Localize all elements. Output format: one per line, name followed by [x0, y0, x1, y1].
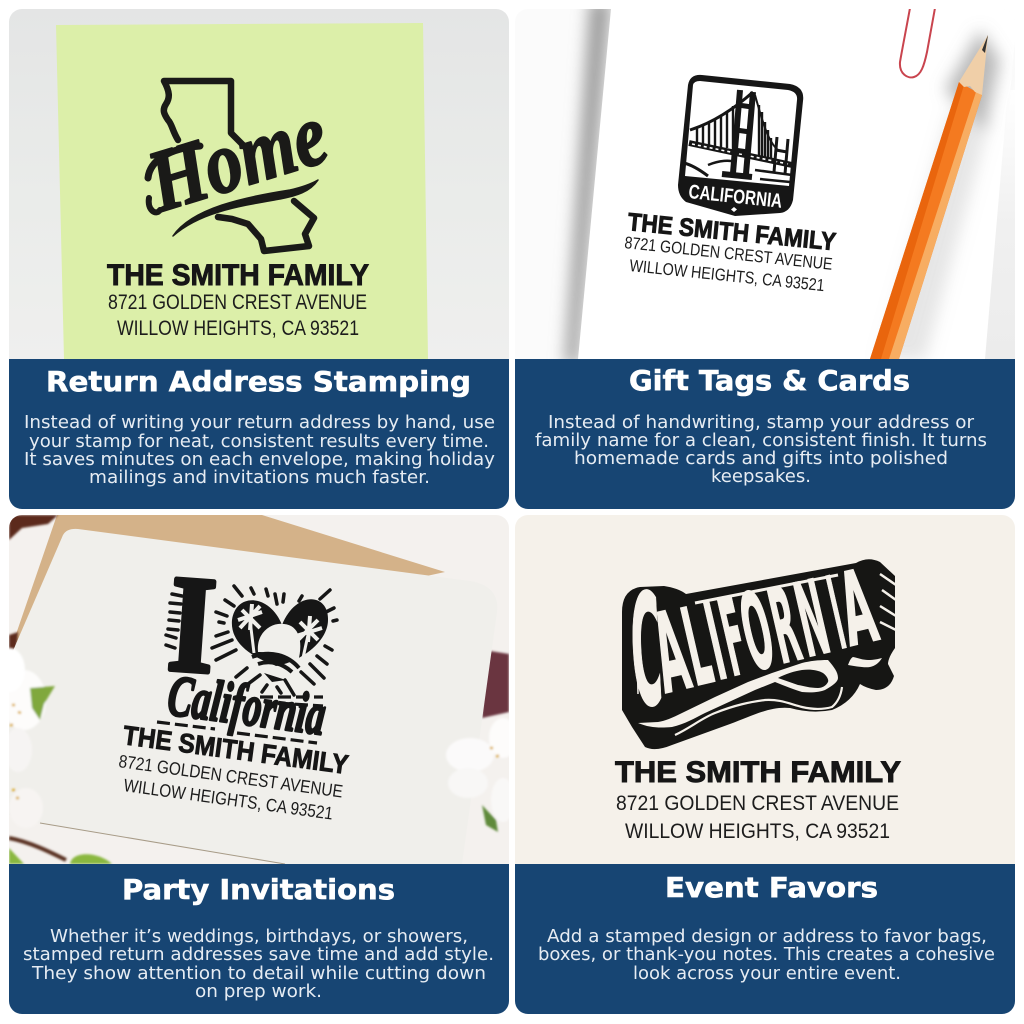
letters: A: [829, 548, 887, 670]
photo background: [515, 515, 1015, 864]
California state outline north: [164, 81, 244, 146]
sticky note: [56, 23, 428, 359]
swoosh under Home: [173, 180, 318, 236]
ribbon swash: [638, 660, 838, 728]
stamp text: family name and address: WILLOW HEIGHTS, CA 93521: [629, 256, 826, 295]
body text: Instead of writing your return address by hand, use: [24, 413, 495, 433]
stamp text: family name and address: THE SMITH FAMILY: [626, 208, 837, 256]
stamp text: family name and address: [107, 259, 369, 340]
caption band: [515, 359, 1015, 509]
body text: on prep work.: [195, 982, 322, 1002]
ribbon lower streak: [675, 687, 842, 735]
letters: I: [696, 581, 735, 705]
stamp text: family name and address: THE SMITH FAMILY: [107, 259, 369, 292]
letters: N: [785, 558, 839, 681]
sunburst rays: [166, 586, 337, 695]
stamp text: family name and address: [117, 720, 350, 824]
right backdrop strip: [985, 163, 1015, 359]
body text: It saves minutes on each envelope, making holiday: [24, 450, 495, 470]
stamp icon: California outline with Home script: [137, 81, 338, 251]
body text: look across your entire event.: [633, 964, 901, 984]
stamp text: family name and address: THE SMITH FAMILY: [615, 756, 901, 789]
sheet shadow: [565, 0, 611, 365]
bridge: [684, 90, 792, 182]
photo background: wall: [9, 9, 509, 359]
letters: [626, 548, 887, 742]
heading: Return Address Stamping: [46, 365, 471, 398]
stamp text: family name and address: WILLOW HEIGHTS, CA 93521: [122, 775, 334, 824]
panel: return address stamping: [9, 9, 509, 509]
letters: A: [642, 589, 700, 719]
stamp text: family name and address: 8721 GOLDEN CREST AVENUE: [624, 233, 833, 274]
dark foliage: [9, 515, 509, 718]
caption band: [515, 864, 1015, 1014]
caption band: [9, 864, 509, 1014]
stamp text: family name and address: 8721 GOLDEN CREST AVENUE: [616, 792, 899, 815]
heading: Event Favors: [665, 871, 878, 904]
stamp text: family name and address: [615, 756, 901, 843]
letters: I: [819, 557, 854, 673]
top stripe: [695, 575, 838, 603]
Home script: Home: [137, 86, 338, 231]
body text: [538, 927, 995, 984]
panel: gift tags and cards: [515, 0, 1018, 509]
photo background: [9, 515, 509, 864]
stamp text: family name and address: 8721 GOLDEN CREST AVENUE: [108, 291, 367, 314]
California state outline south: [218, 201, 314, 251]
heart with sun and palms: [232, 599, 328, 682]
body text: Add a stamped design or address to favor bags,: [547, 927, 987, 947]
invitation card: [13, 528, 492, 719]
stamp icon: California lettering: [622, 548, 896, 749]
white sheet: [578, 9, 623, 359]
panel: party invitations: [0, 515, 517, 1014]
stamp text: family name and address: WILLOW HEIGHTS, CA 93521: [117, 317, 359, 340]
stamp text: family name and address: THE SMITH FAMILY: [121, 720, 350, 780]
body text: keepsakes.: [711, 467, 811, 487]
body text: [24, 413, 495, 488]
body text: family name for a clean, consistent finish. It turns: [535, 431, 987, 451]
right hatch marks: [880, 574, 896, 630]
body text: Instead of handwriting, stamp your address or: [548, 413, 975, 433]
body text: Whether it’s weddings, birthdays, or showers,: [50, 927, 468, 947]
stamp text: family name and address: 8721 GOLDEN CREST AVENUE: [117, 751, 344, 802]
body text: [23, 927, 494, 1002]
letters: F: [710, 577, 757, 701]
heading: Party Invitations: [122, 873, 395, 906]
badge label: CALIFORNIA: [687, 181, 783, 213]
body text: your stamp for neat, consistent results every time.: [29, 432, 489, 452]
body text: [535, 413, 987, 487]
paperclip: [900, 8, 935, 77]
body text: homemade cards and gifts into polished: [574, 449, 948, 469]
pencil shadow: [880, 30, 1000, 360]
Home script: [144, 122, 328, 216]
stamp text: family name and address: WILLOW HEIGHTS, CA 93521: [625, 820, 890, 843]
pencil: [870, 35, 988, 359]
panel: event favors: [515, 515, 1015, 1014]
photo background: [515, 9, 1015, 359]
black block: [622, 559, 895, 749]
letters: C: [626, 560, 666, 742]
body text: They show attention to detail while cutting down: [31, 964, 486, 984]
body text: mailings and invitations much faster.: [89, 468, 430, 488]
letters: R: [760, 566, 810, 689]
letters: L: [673, 584, 722, 711]
flowers and leaves: [0, 648, 517, 864]
caption band: [9, 359, 509, 509]
dashes: [157, 697, 323, 743]
stamp text: family name and address: [624, 208, 837, 295]
letter I: I: [164, 548, 220, 703]
body text: boxes, or thank-you notes. This creates a cohesive: [538, 945, 995, 965]
ribbon teardrop: [778, 670, 828, 688]
stamp icon: Golden Gate badge: [678, 75, 803, 216]
body text: stamped return addresses save time and add style.: [23, 945, 494, 965]
stamp icon: I love California: [156, 576, 339, 745]
letters: O: [730, 570, 784, 696]
script word California: California: [164, 662, 329, 748]
heading: Gift Tags & Cards: [629, 364, 910, 397]
ribbon right swirl: [848, 657, 882, 667]
kraft envelope: [16, 515, 445, 642]
